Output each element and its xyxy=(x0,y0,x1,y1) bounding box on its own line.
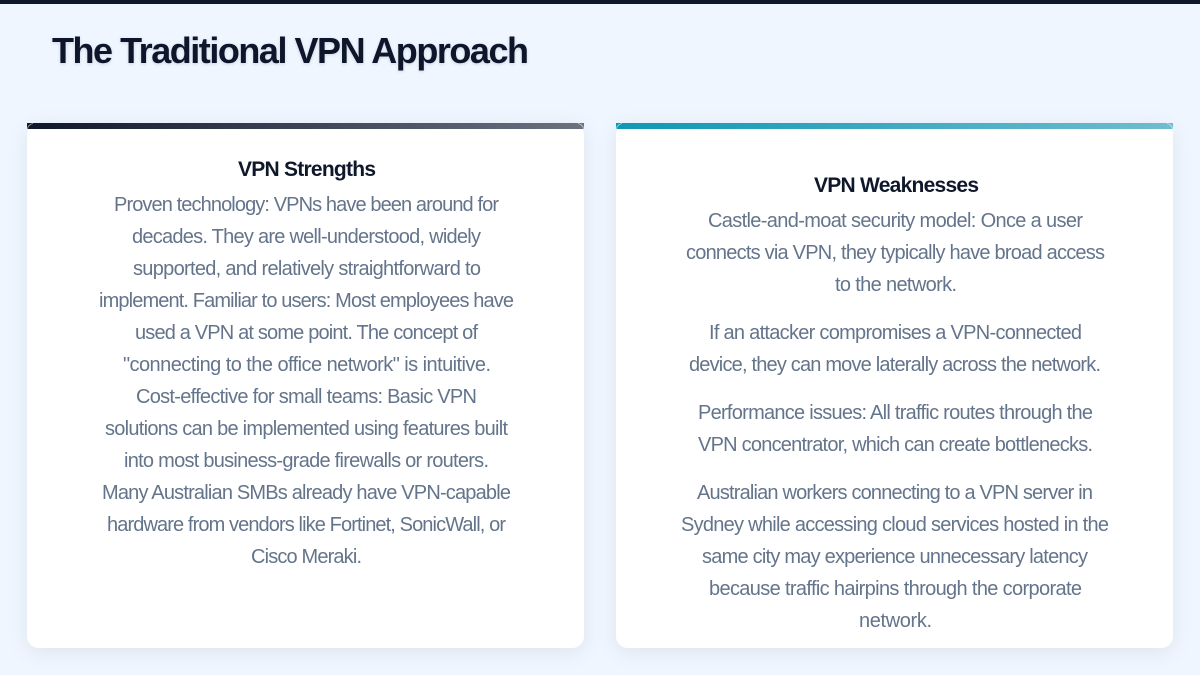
text block: strengths: Many Australian SMBs already have VPN-capable xyxy=(102,482,511,504)
panel: VPN weaknesses xyxy=(616,123,1173,648)
text block: strengths: implement. Familiar to users: Most employees have xyxy=(99,290,514,312)
text block: weaknesses: Performance issues: All traffic routes through the xyxy=(698,402,1093,424)
heading: VPN weaknesses: VPN Weaknesses xyxy=(814,174,979,197)
text block: weaknesses xyxy=(681,210,1109,632)
text block: strengths: Cisco Meraki. xyxy=(251,546,362,568)
text block: strengths: hardware from vendors like Fortinet, SonicWall, or xyxy=(107,514,506,536)
text block: strengths: decades. They are well-understood, widely xyxy=(132,226,481,248)
text block: strengths: into most business-grade firewalls or routers. xyxy=(124,450,489,472)
text block: strengths: "connecting to the office network" is intuitive. xyxy=(123,354,491,376)
text block: weaknesses: connects via VPN, they typically have broad access xyxy=(686,242,1105,264)
text block: strengths: used a VPN at some point. The concept of xyxy=(135,322,478,344)
text block: weaknesses: same city may experience unnecessary latency xyxy=(702,546,1088,568)
text block: strengths: Cost-effective for small teams: Basic VPN xyxy=(136,386,477,408)
text block: weaknesses: VPN concentrator, which can create bottlenecks. xyxy=(698,434,1093,456)
text block: weaknesses: device, they can move laterally across the network. xyxy=(689,354,1101,376)
panel: VPN strengths xyxy=(27,123,584,648)
text block: weaknesses: Sydney while accessing cloud services hosted in the xyxy=(681,514,1109,536)
title: The Traditional VPN Approach xyxy=(52,30,529,71)
text block: strengths: solutions can be implemented using features built xyxy=(105,418,508,440)
text block: strengths: supported, and relatively straightforward to xyxy=(133,258,481,280)
text block: weaknesses: If an attacker compromises a VPN-connected xyxy=(709,322,1082,344)
text block: weaknesses: to the network. xyxy=(835,274,957,296)
text block: weaknesses: Castle-and-moat security model: Once a user xyxy=(708,210,1083,232)
text block: strengths: Proven technology: VPNs have been around for xyxy=(114,194,499,216)
text block: weaknesses: Australian workers connecting to a VPN server in xyxy=(697,482,1093,504)
text block: weaknesses: because traffic hairpins through the corporate xyxy=(709,578,1082,600)
text block: strengths xyxy=(99,194,514,568)
text block: weaknesses: network. xyxy=(859,610,932,632)
heading: VPN strengths: VPN Strengths xyxy=(238,158,376,181)
